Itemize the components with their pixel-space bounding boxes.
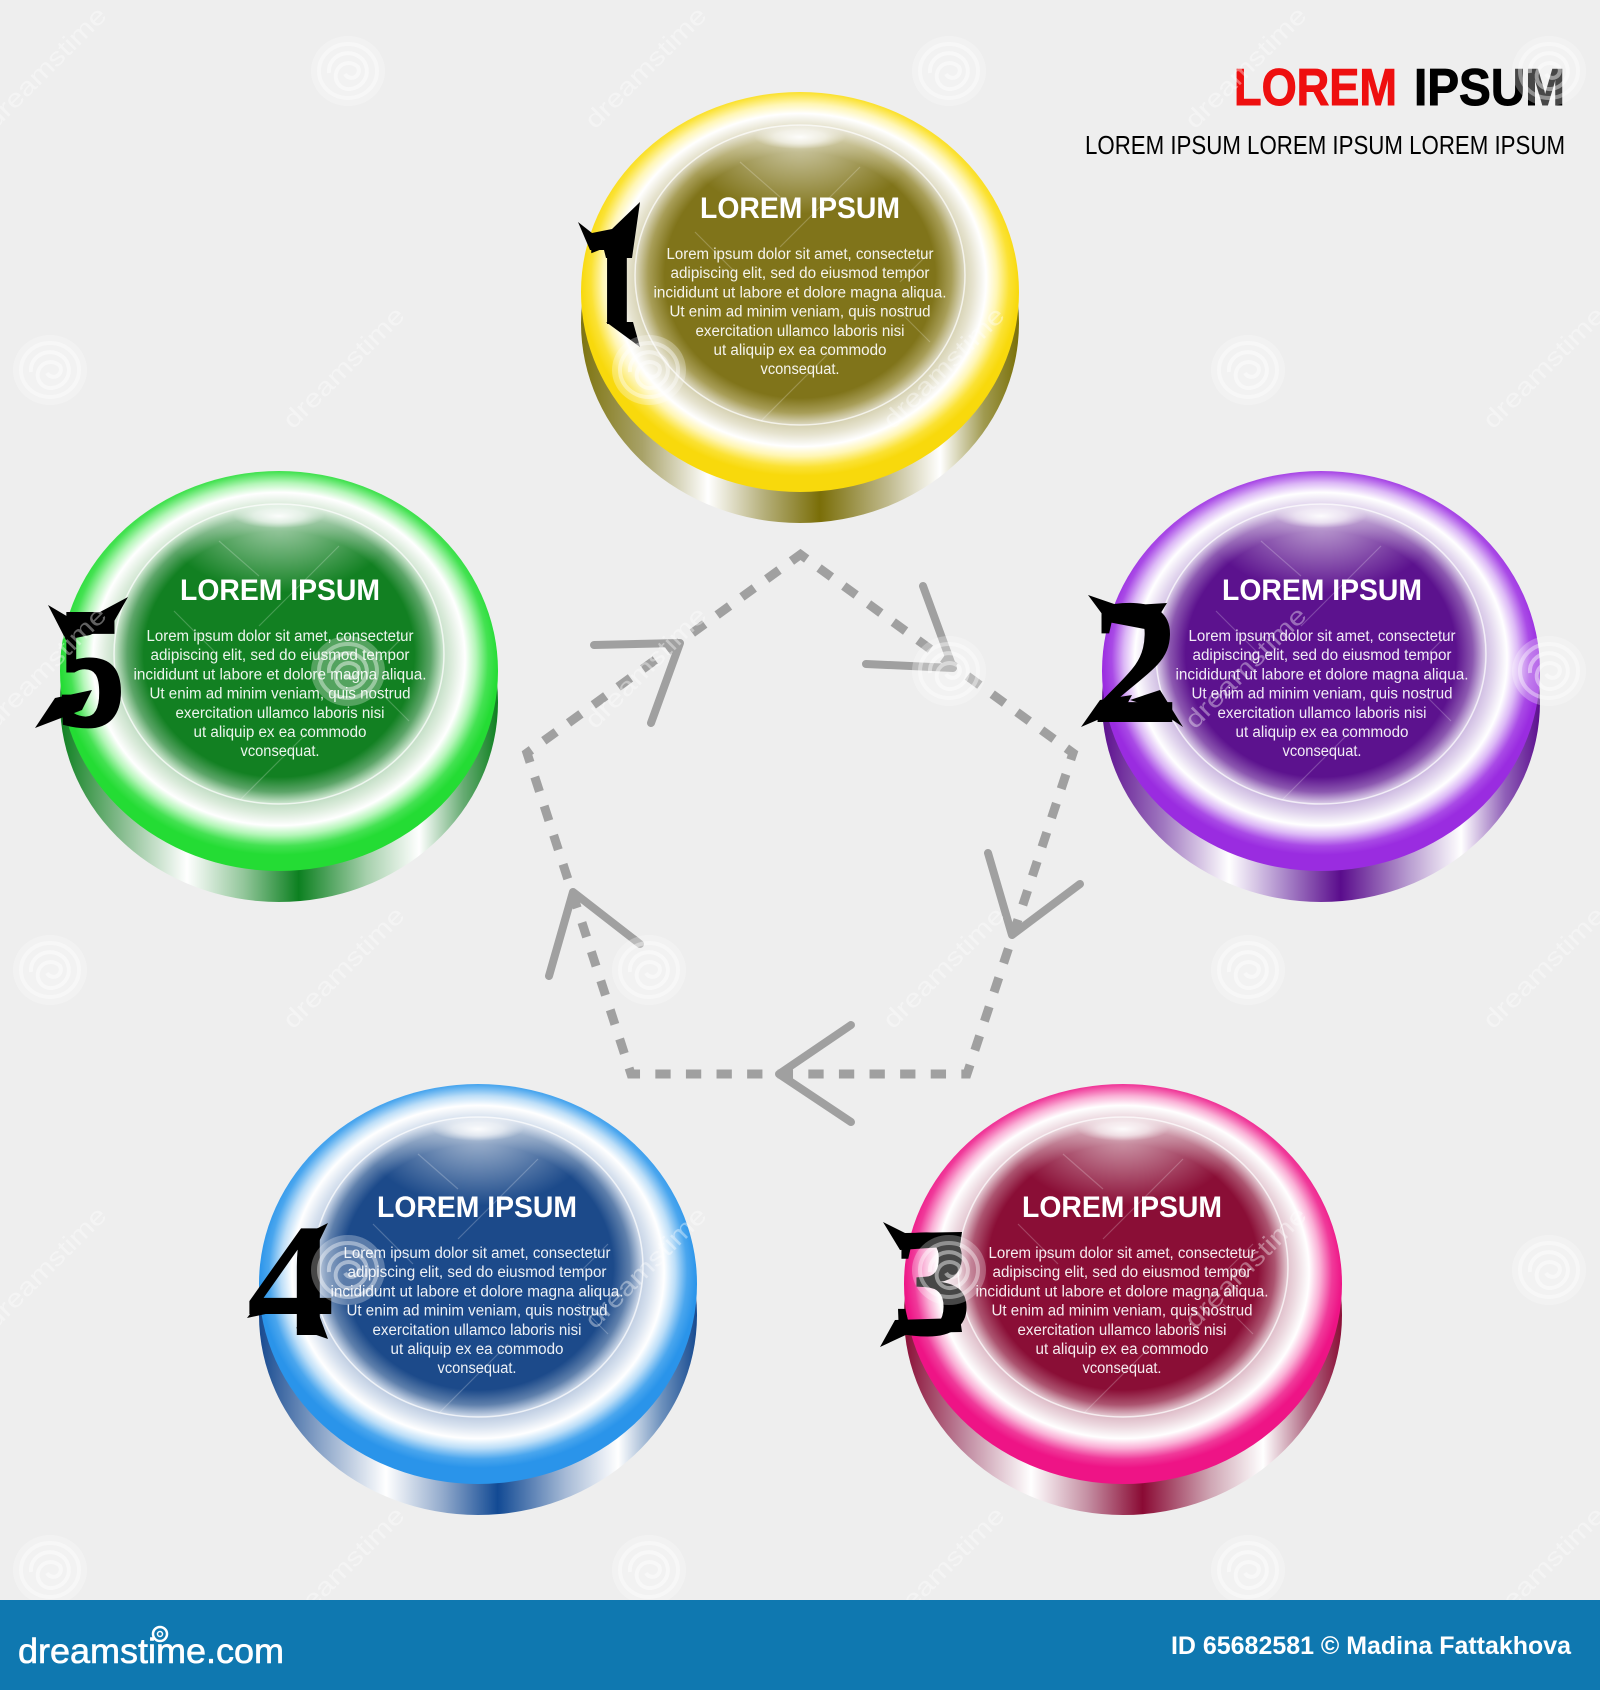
body text: ut aliquip ex ea commodo: [714, 342, 886, 359]
body text: Ut enim ad minim veniam, quis nostrud: [150, 686, 410, 703]
heading: LOREM IPSUM: [1022, 1191, 1222, 1224]
body text: [654, 246, 946, 378]
body text: Ut enim ad minim veniam, quis nostrud: [670, 304, 930, 321]
number 1: [578, 202, 640, 347]
panel: step 4 blue disc: [247, 1062, 697, 1515]
body text: exercitation ullamco laboris nisi: [1018, 1322, 1226, 1339]
body text: incididunt ut labore et dolore magna aliqua.: [976, 1283, 1268, 1300]
panel: step 2 purple disc: [1081, 449, 1540, 902]
heading: LOREM IPSUM: [377, 1191, 577, 1224]
body text: [330, 1245, 624, 1377]
body text: vconsequat.: [1282, 743, 1362, 760]
footer credit: ID 65682581 © Madina Fattakhova: [1171, 1632, 1572, 1660]
watermark overlay: dreamstime: [877, 901, 1010, 1034]
body text: ut aliquip ex ea commodo: [1036, 1341, 1208, 1358]
arrow: step 1 to 2: [866, 586, 953, 668]
watermark overlay: dreamstime: [1179, 601, 1312, 734]
watermark overlay: dreamstime: [1179, 1, 1312, 134]
footer bar: [0, 1600, 1600, 1690]
watermark overlay: dreamstime: [579, 1, 712, 134]
body text: Lorem ipsum dolor sit amet, consectetur: [344, 1245, 610, 1262]
dashed pentagon cycle: [527, 554, 1080, 1122]
panel: step 1 yellow disc: [578, 70, 1019, 523]
watermark overlay: dreamstime: [1477, 1501, 1600, 1634]
body text: Ut enim ad minim veniam, quis nostrud: [346, 1303, 608, 1320]
body text: incididunt ut labore et dolore magna aliqua.: [1176, 666, 1468, 683]
heading: lorem ipsum: IPSUM: [1414, 59, 1565, 117]
panel: step 3 pink disc: [880, 1062, 1342, 1515]
panel: step 5 green disc: [35, 449, 498, 902]
body text: exercitation ullamco laboris nisi: [1218, 705, 1426, 722]
body text: ut aliquip ex ea commodo: [390, 1341, 564, 1358]
footer logo: dreamstime.com: [18, 1632, 284, 1671]
body text: vconsequat.: [1082, 1360, 1162, 1377]
body text: adipiscing elit, sed do eiusmod tempor: [150, 647, 410, 664]
body text: exercitation ullamco laboris nisi: [176, 705, 384, 722]
body text: vconsequat.: [438, 1360, 516, 1377]
body text: ut aliquip ex ea commodo: [194, 724, 366, 741]
heading: LOREM IPSUM: [1222, 574, 1422, 607]
disc shape: [1102, 449, 1540, 902]
body text: Lorem ipsum dolor sit amet, consectetur: [988, 1245, 1256, 1262]
body text: Lorem ipsum dolor sit amet, consectetur: [1188, 628, 1456, 645]
body text: vconsequat.: [240, 743, 320, 760]
watermark overlay: dreamstime: [1477, 301, 1600, 434]
body text: vconsequat.: [760, 361, 840, 378]
heading: LOREM IPSUM: [180, 574, 380, 607]
disc shape: [259, 1062, 697, 1515]
watermark overlay: dreamstime: [277, 901, 410, 1034]
arrow: step 5 to 1: [594, 643, 680, 723]
heading: lorem ipsum: [1234, 59, 1565, 117]
watermark overlay: dreamstime: [277, 301, 410, 434]
arrow: step 4 to 5: [549, 892, 640, 976]
body text: adipiscing elit, sed do eiusmod tempor: [1192, 647, 1452, 664]
disc shape: [60, 449, 498, 902]
body text: Lorem ipsum dolor sit amet, consectetur: [146, 628, 414, 645]
disc shape: [904, 1062, 1342, 1515]
body text: incididunt ut labore et dolore magna aliqua.: [330, 1283, 624, 1300]
watermark overlay: dreamstime: [277, 1501, 410, 1634]
body text: adipiscing elit, sed do eiusmod tempor: [348, 1264, 606, 1281]
number 1: 1: [580, 188, 650, 377]
number 2: 2: [1090, 562, 1180, 761]
body text: [1176, 628, 1468, 760]
arrow: step 2 to 3: [988, 853, 1080, 935]
watermark overlay: dreamstime: [877, 1501, 1010, 1634]
watermark overlay: dreamstime: [1477, 901, 1600, 1034]
watermark overlay: dreamstime: [579, 601, 712, 734]
dashed pentagon outline: [527, 554, 1073, 1074]
body text: incididunt ut labore et dolore magna aliqua.: [134, 666, 426, 683]
body text: exercitation ullamco laboris nisi: [372, 1322, 582, 1339]
number 4: 4: [247, 1192, 334, 1371]
body text: Ut enim ad minim veniam, quis nostrud: [1192, 686, 1452, 703]
heading: lorem ipsum: LOREM: [1234, 59, 1397, 117]
body text: ut aliquip ex ea commodo: [1236, 724, 1408, 741]
body text: [976, 1245, 1268, 1377]
body text: Lorem ipsum dolor sit amet, consectetur: [666, 246, 934, 263]
body text: Ut enim ad minim veniam, quis nostrud: [992, 1303, 1252, 1320]
disc shape: [581, 70, 1019, 523]
arrow: step 3 to 4: [779, 1025, 851, 1122]
body text: incididunt ut labore et dolore magna aliqua.: [654, 284, 946, 301]
watermark overlay: dreamstime: [579, 1201, 712, 1334]
watermark overlay: dreamstime: [877, 301, 1010, 434]
number 3: 3: [892, 1198, 972, 1369]
body text: exercitation ullamco laboris nisi: [696, 323, 904, 340]
heading: LOREM IPSUM: [700, 192, 900, 225]
body text: [134, 628, 426, 760]
body text: adipiscing elit, sed do eiusmod tempor: [992, 1264, 1252, 1281]
title block: [1085, 59, 1565, 160]
number 5: 5: [58, 575, 124, 763]
watermark overlay: dreamstime: [1179, 1201, 1312, 1334]
body text: adipiscing elit, sed do eiusmod tempor: [670, 265, 930, 282]
